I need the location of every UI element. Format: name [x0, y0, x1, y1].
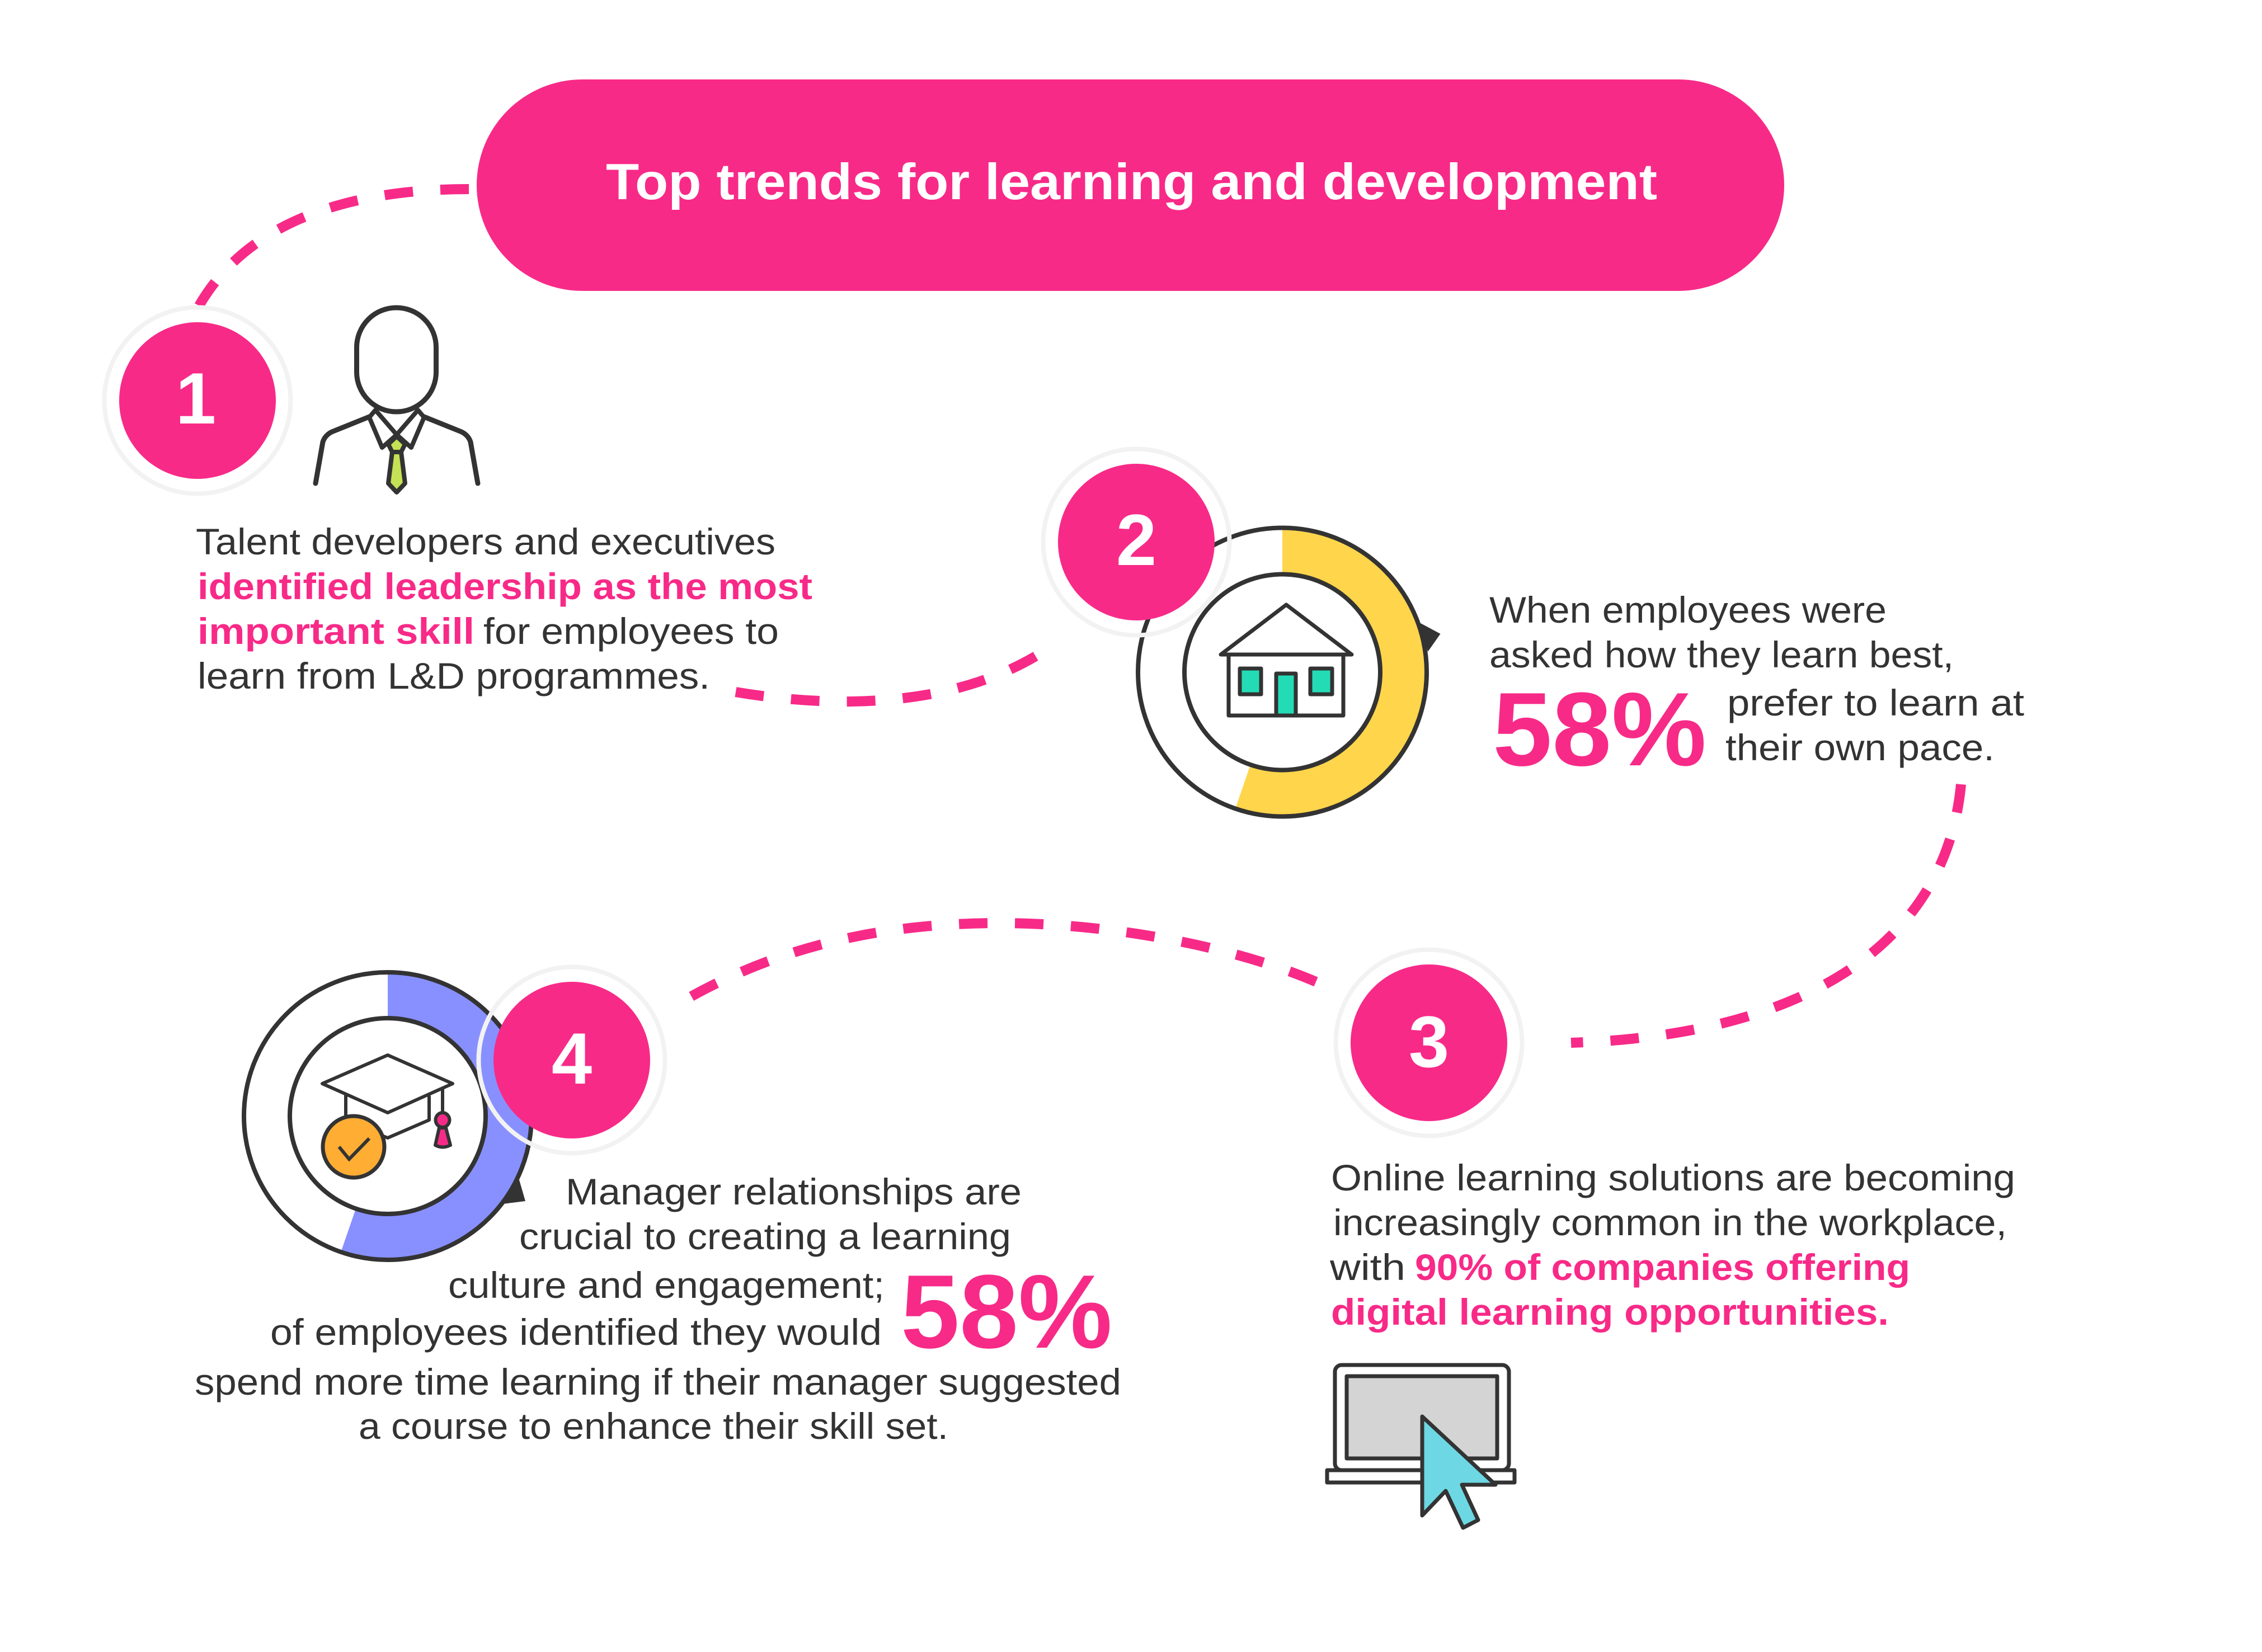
dashed connector: step 3 to step 4: [690, 923, 1316, 997]
step 3: [1327, 950, 2015, 1528]
number badge 1: [104, 308, 291, 493]
text block: step 2: When employees were: [1489, 589, 1887, 630]
number badge 3: [1336, 950, 1522, 1136]
text block: step 2: asked how they learn best,: [1489, 634, 1954, 675]
step 1: [104, 308, 812, 696]
text block: step 3: Online learning solutions are becoming: [1331, 1157, 2015, 1198]
number badge 4: 4: [552, 1018, 592, 1099]
icon: house: [1221, 605, 1352, 716]
donut chart 58% with graduation cap icon: [244, 972, 532, 1260]
text block: step 4: a course to enhance their skill set.: [359, 1405, 948, 1447]
text block: step 1: learn from L&D programmes.: [197, 655, 710, 696]
number badge 4: [479, 967, 665, 1154]
icon: graduation cap with check badge: [322, 1055, 453, 1178]
text block: step 1: for employees to: [483, 610, 779, 652]
step 2: [1043, 449, 2024, 817]
text block: step 3: increasingly common in the workplace,: [1333, 1202, 2007, 1243]
text block: step 4: [195, 1171, 1121, 1447]
text block: step 4: of employees identified they would: [270, 1311, 882, 1353]
step 4: [195, 967, 1121, 1447]
number badge 2: [1043, 449, 1230, 636]
text block: step 1: important skill: [197, 610, 474, 652]
text block: step 2: [1489, 589, 2024, 788]
number badge 1: 1: [176, 357, 216, 439]
text block: step 3: digital learning opportunities.: [1331, 1291, 1889, 1333]
title banner: [477, 79, 1784, 291]
text block: step 4: 58%: [901, 1253, 1112, 1370]
text block: step 2: 58%: [1493, 671, 1706, 788]
icon: business person with tie: [316, 308, 478, 492]
text block: step 4: Manager relationships are: [566, 1171, 1022, 1212]
donut chart 58% with house icon: [1138, 528, 1440, 817]
title banner: Top trends for learning and development: [606, 154, 1657, 210]
text block: step 1: identified leadership as the most: [197, 566, 812, 607]
text block: step 4: spend more time learning if their manager suggested: [195, 1361, 1121, 1402]
text block: step 4: crucial to creating a learning: [519, 1216, 1011, 1257]
dashed connector: title to step 1: [199, 189, 469, 307]
text block: step 3: 90% of companies offering: [1415, 1246, 1910, 1288]
number badge 2: 2: [1116, 499, 1156, 581]
text block: step 2: their own pace.: [1725, 727, 1995, 768]
number badge 3: 3: [1409, 1001, 1449, 1082]
text block: step 3: [1329, 1157, 2015, 1333]
text block: step 3: with: [1329, 1246, 1405, 1288]
dashed connector: step 1 to step 2: [736, 656, 1036, 702]
text block: step 1: Talent developers and executives: [196, 521, 775, 562]
text block: step 1: [196, 521, 812, 696]
text block: step 2: prefer to learn at: [1727, 682, 2024, 723]
dashed connector: step 2 to step 3: [1571, 784, 1961, 1043]
icon: laptop with cursor: [1327, 1365, 1515, 1528]
text block: step 4: culture and engagement;: [448, 1264, 885, 1306]
